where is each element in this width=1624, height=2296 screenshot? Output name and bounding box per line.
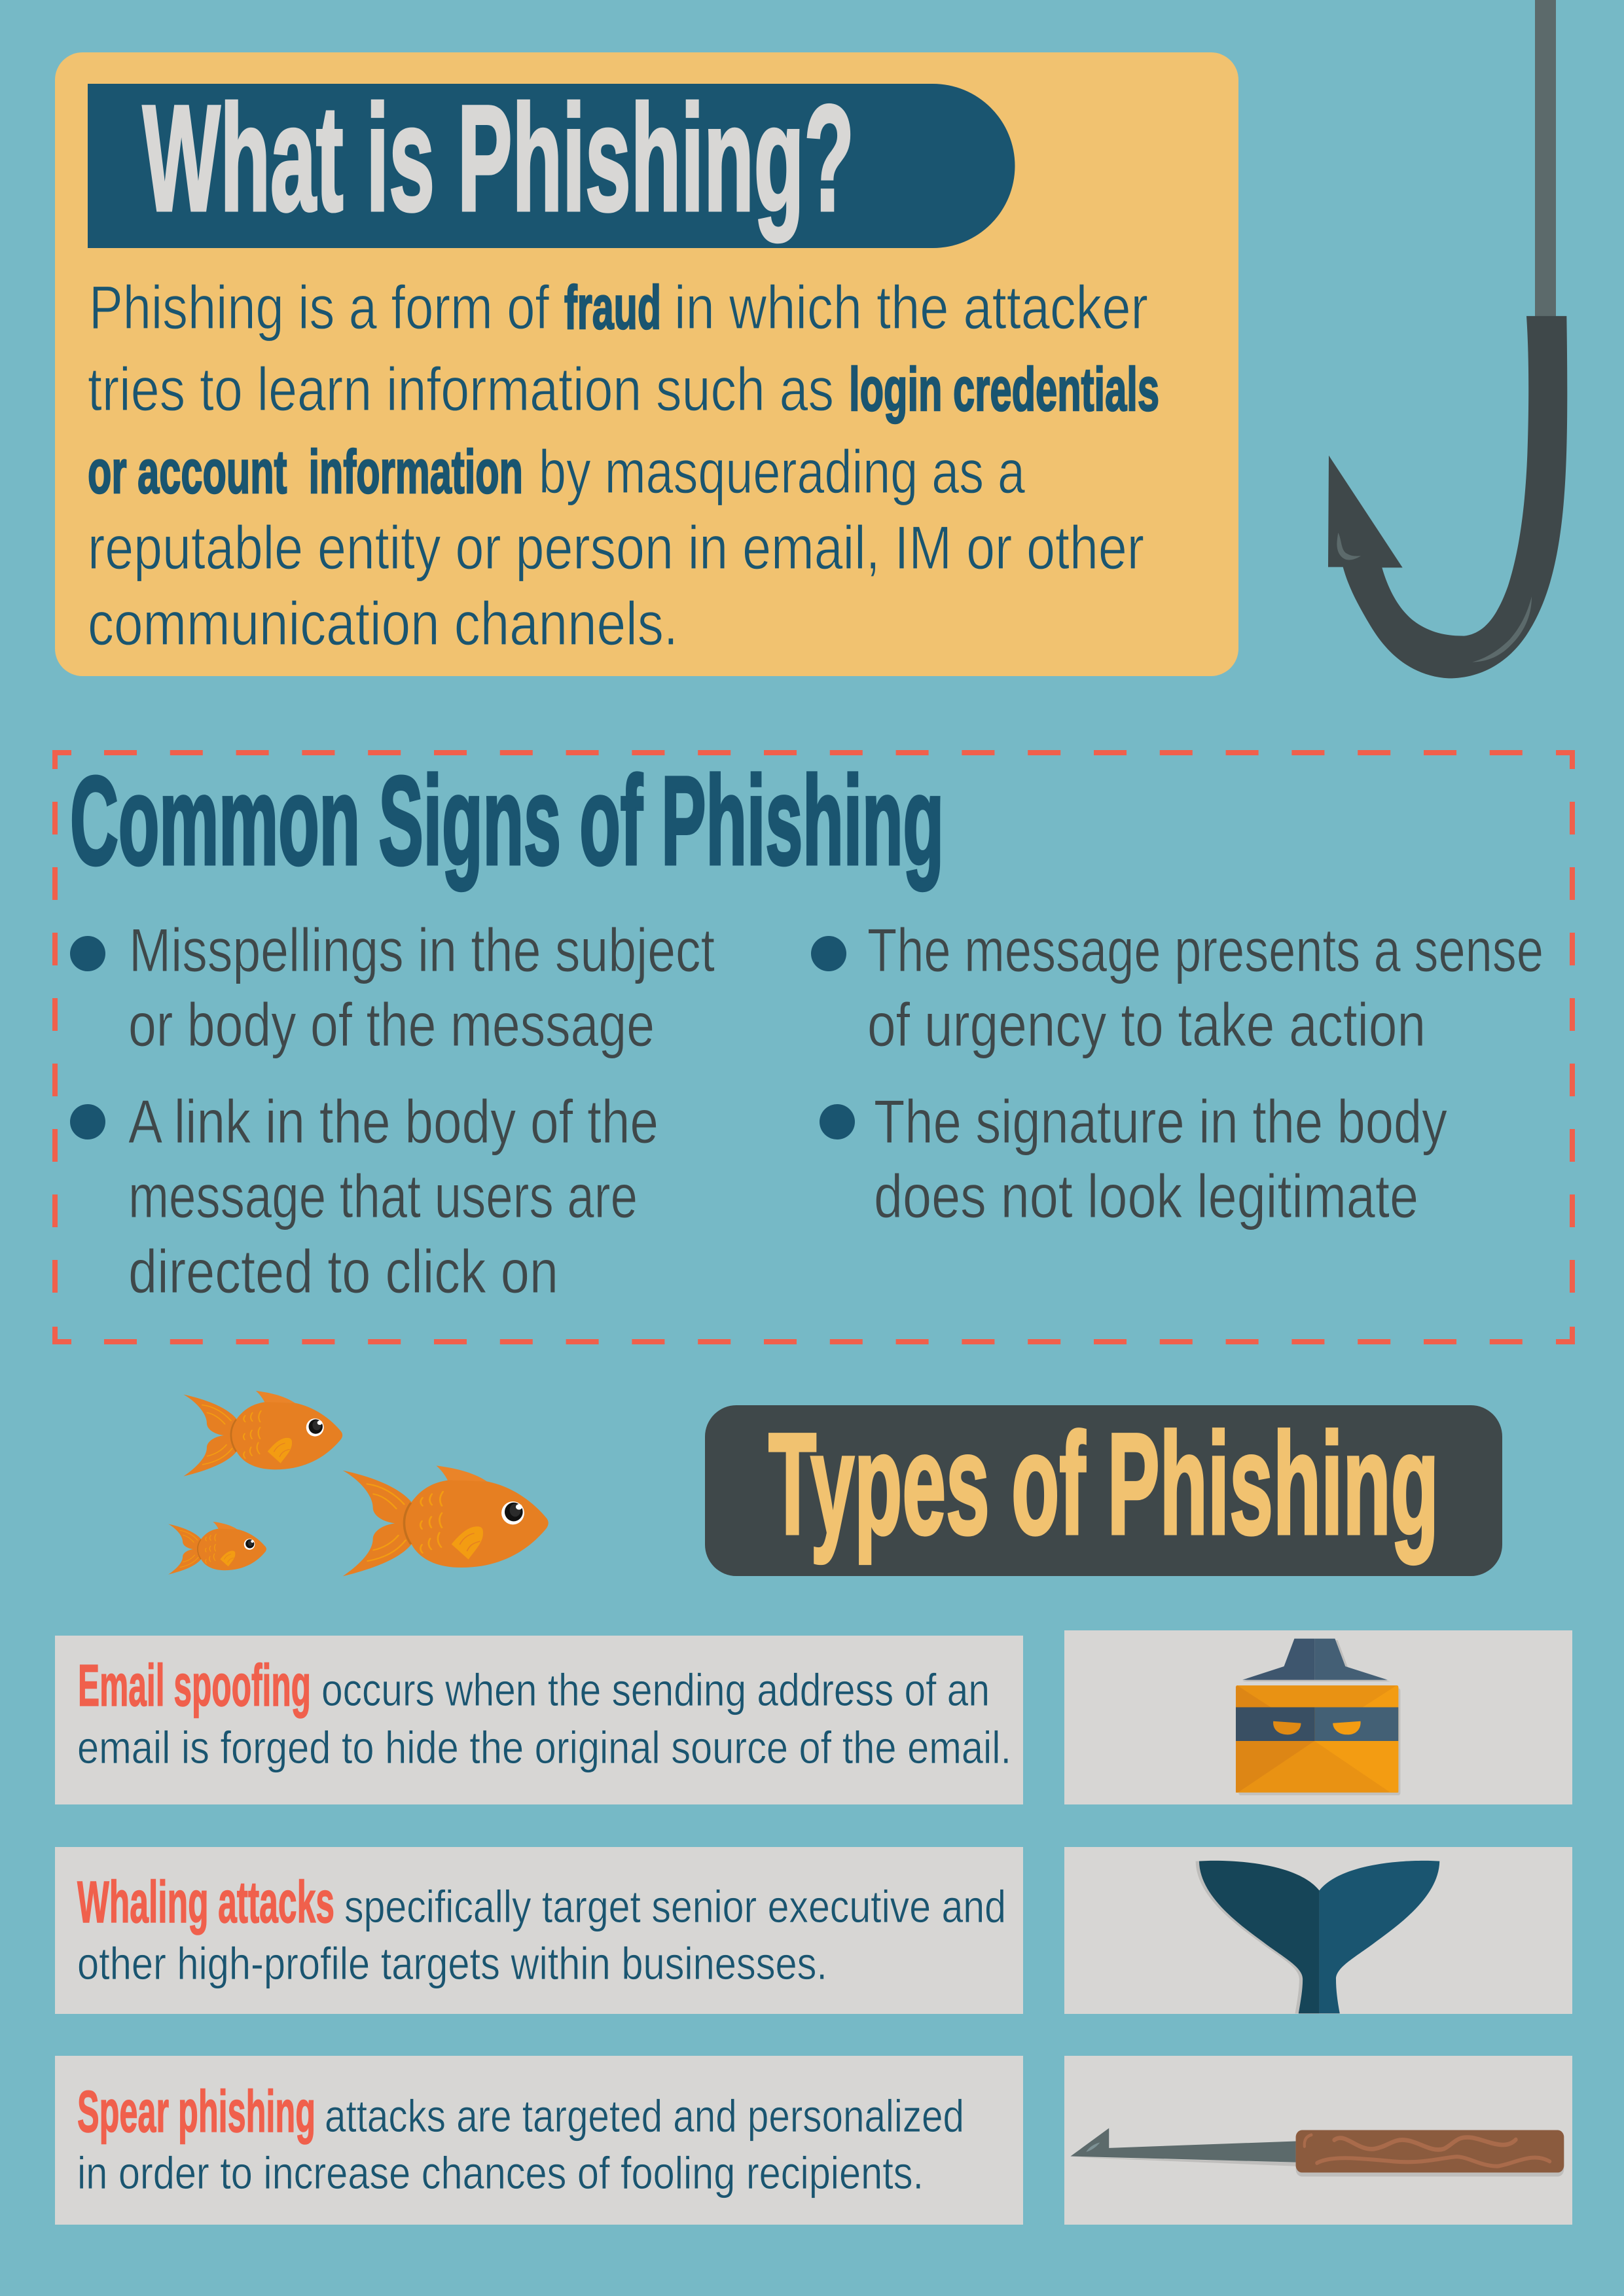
- dashed frame: [55, 753, 1572, 1342]
- icon: whale tail: [1196, 1861, 1439, 2013]
- panel: spear phishing description: attacks are targeted and personalized: [325, 2090, 964, 2142]
- panel: whaling attacks description: specifically target senior executive and: [344, 1881, 1006, 1932]
- icon: three goldfish: [168, 1391, 549, 1576]
- panel: whaling attacks description: Whaling attacks: [77, 1870, 334, 1935]
- icon: masked envelope with hat: [1236, 1639, 1400, 1795]
- panel: common signs of phishing: [55, 750, 1572, 1342]
- panel: whale tail icon: [1064, 1847, 1572, 2014]
- definition text: or account information: [88, 437, 523, 506]
- definition text: tries to learn information such as: [88, 355, 834, 423]
- title banner: [88, 74, 1015, 248]
- definition text: reputable entity or person in email, IM or other: [88, 513, 1144, 582]
- definition text: login credentials: [849, 355, 1159, 423]
- definition text: Phishing is a form of: [89, 273, 550, 342]
- definition text: fraud: [564, 273, 661, 342]
- title: What is Phishing?: [143, 74, 854, 242]
- bullet: misspellings: or body of the message: [128, 990, 655, 1059]
- panel: email spoofing description: [55, 1636, 1023, 1804]
- bullet: misspellings: [70, 916, 715, 1059]
- panel: email icon: [1064, 1630, 1572, 1804]
- panel: what is phishing: [55, 52, 1238, 676]
- bullet: link: A link in the body of the: [128, 1087, 659, 1156]
- icon: fishing hook: [1328, 0, 1567, 678]
- panel: email spoofing description: occurs when the sending address of an: [321, 1664, 990, 1715]
- bullet: urgency: [811, 916, 1543, 1059]
- panel: spear phishing description: [55, 2056, 1023, 2225]
- bullet: urgency: of urgency to take action: [867, 990, 1426, 1059]
- bullet: misspellings: Misspellings in the subject: [129, 916, 715, 984]
- bullet: link: [70, 1087, 659, 1306]
- panel: whaling attacks description: other high-profile targets within businesses.: [77, 1938, 827, 1989]
- panel: email spoofing description: Email spoofing: [78, 1653, 311, 1719]
- panel: spear phishing description: Spear phishing: [77, 2079, 316, 2145]
- bullet: link: directed to click on: [128, 1237, 558, 1306]
- icon: spear: [1070, 2128, 1564, 2176]
- panel: email spoofing description: email is forged to hide the original source of the email.: [77, 1722, 1011, 1773]
- bullet: signature: [820, 1087, 1447, 1230]
- panel: spear icon: [1064, 2056, 1572, 2225]
- panel: whaling attacks description: [55, 1847, 1023, 2014]
- bullet: signature: does not look legitimate: [874, 1162, 1418, 1230]
- bullet: signature: The signature in the body: [874, 1087, 1447, 1156]
- panel: spear phishing description: in order to increase chances of fooling recipients.: [77, 2147, 924, 2198]
- definition text: in which the attacker: [674, 273, 1148, 342]
- definition text: by masquerading as a: [539, 437, 1026, 506]
- definition text: [88, 273, 1159, 658]
- definition text: communication channels.: [88, 589, 678, 658]
- bullet: link: message that users are: [128, 1162, 638, 1230]
